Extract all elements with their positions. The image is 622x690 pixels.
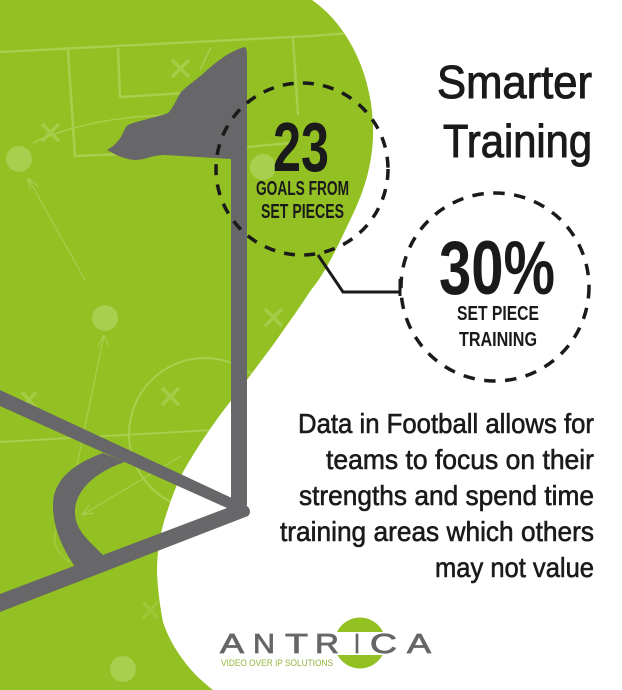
body text xyxy=(280,408,594,583)
title: Smarter xyxy=(437,56,592,108)
body text: strengths and spend time xyxy=(299,480,594,511)
logo: Antrica: T xyxy=(285,628,308,659)
body text: teams to focus on their xyxy=(326,444,594,475)
circle: 30% set piece training xyxy=(401,193,589,381)
logo: Antrica: R xyxy=(315,628,339,659)
body text: may not value xyxy=(435,552,594,583)
circle: 23 goals from set pieces: GOALS FROM xyxy=(256,178,349,200)
logo: Antrica: VIDEO OVER IP SOLUTIONS xyxy=(221,658,333,668)
logo: Antrica: A xyxy=(407,628,431,659)
circle: 23 goals from set pieces: SET PIECES xyxy=(261,201,344,223)
flag xyxy=(107,47,247,505)
panel: green pitch background xyxy=(0,0,373,690)
corner arc xyxy=(53,453,125,567)
body text: training areas which others xyxy=(280,516,594,547)
corner flag illustration xyxy=(0,47,250,612)
logo: Antrica: C xyxy=(370,628,397,659)
circle: 30% set piece training: 30% xyxy=(439,226,555,311)
logo: Antrica: N xyxy=(253,628,275,659)
circle: 23 goals from set pieces: 23 xyxy=(273,108,329,186)
circle: 23 goals from set pieces xyxy=(216,83,388,255)
logo: Antrica: A xyxy=(220,628,244,659)
logo: Antrica xyxy=(220,618,431,668)
pitch tactics drawing xyxy=(0,33,350,682)
title: Training xyxy=(443,115,592,167)
connector between circles xyxy=(318,255,400,296)
circle: 30% set piece training: SET PIECE xyxy=(457,303,539,325)
body text: Data in Football allows for xyxy=(298,408,594,439)
logo: Antrica: I xyxy=(354,628,360,659)
title xyxy=(437,56,592,167)
circle: 30% set piece training: TRAINING xyxy=(459,329,537,351)
pitch lines xyxy=(0,390,250,612)
